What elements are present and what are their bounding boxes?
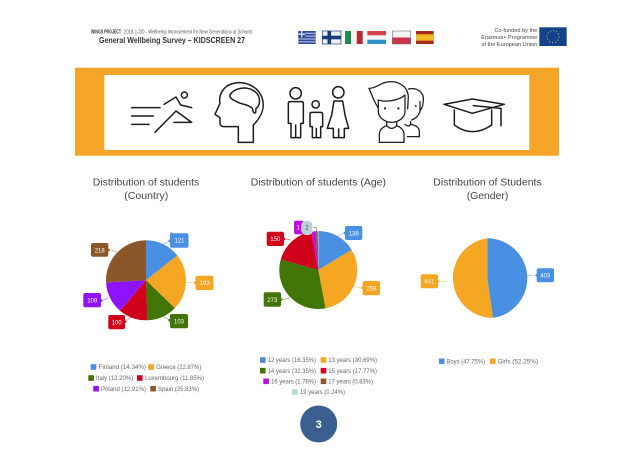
icon: students [369, 82, 423, 142]
value tag: 403: 403 [540, 274, 551, 280]
chart title: gender [433, 176, 542, 202]
icon: graduation cap [444, 99, 504, 132]
value tag: 121: 121 [174, 239, 185, 245]
chart title: gender: Distribution of Students [433, 176, 542, 188]
value tag: 273: 273 [267, 298, 278, 304]
legend: age: 14 years (32.35%) [268, 369, 316, 375]
icon: head with brain [215, 83, 263, 142]
flag: Greece [298, 31, 316, 44]
value tag: 138: 138 [349, 232, 359, 238]
legend: country: Luxembourg (11.85%) [145, 376, 204, 382]
legend: country: Poland (12.91%) [101, 387, 146, 393]
legend: country: Greece (22.87%) [156, 365, 201, 371]
pie chart: age [264, 221, 380, 309]
value tag: 109: 109 [87, 299, 98, 305]
legend: age [260, 357, 377, 396]
legend: gender: Girls (52.25%) [498, 360, 538, 366]
banner: orange frame [75, 68, 559, 156]
legend: gender: Boys (47.75%) [446, 360, 485, 366]
chart title: country: Distribution of students [93, 176, 199, 188]
legend: gender [439, 358, 538, 366]
legend: age: 15 years (17.77%) [328, 369, 377, 375]
icon: family [288, 87, 349, 138]
value tag: 441: 441 [424, 280, 435, 286]
flag: Spain [416, 31, 434, 44]
brown leader tick [309, 228, 316, 231]
icon: runner [132, 92, 192, 132]
EU co-funded logo: of the European Union [481, 42, 537, 48]
value tag: 1: 1 [297, 226, 301, 232]
legend: country: Italy (12.20%) [96, 376, 133, 382]
value tag: 103: 103 [174, 320, 185, 326]
chart title: age: Distribution of students (Age) [251, 176, 386, 188]
pie chart: country [83, 232, 214, 329]
header: project title: General Wellbeing Survey – KIDSCREEN 27 [99, 35, 245, 45]
value tag: 193: 193 [199, 281, 210, 287]
value tag: 259: 259 [366, 286, 377, 292]
legend: age: 16 years (1.78%) [271, 380, 316, 386]
value tag: 218: 218 [95, 249, 105, 255]
flags row [298, 31, 434, 44]
chart title: country [93, 176, 199, 202]
legend: age: 19 years (0.24%) [300, 390, 345, 396]
banner icons [132, 82, 504, 142]
EU co-funded logo: Erasmus+ Programme [481, 35, 537, 41]
value tag: 100: 100 [112, 321, 122, 327]
EU co-funded logo [481, 27, 567, 48]
header: project title [91, 30, 253, 45]
value tag: 150: 150 [270, 237, 281, 243]
flag: Poland [392, 31, 411, 44]
EU co-funded logo: Co-funded by the [494, 28, 537, 34]
chart title: country: (Country) [124, 190, 168, 202]
header: project title: 2018-1-DD - Wellbeing Improvement for New Generations at Schools [124, 30, 253, 36]
pie chart: gender [421, 238, 554, 318]
value tag: 2: 2 [305, 226, 309, 232]
legend: age: 12 years (16.35%) [268, 358, 316, 364]
flag: Finland [322, 31, 341, 44]
legend: age: 17 years (0.83%) [328, 380, 373, 386]
legend: age: 13 years (30.69%) [328, 358, 377, 364]
flag: Italy [345, 31, 363, 44]
flag: Luxembourg [367, 31, 386, 44]
page number badge [300, 406, 337, 442]
header: project title: WINGS PROJECT [91, 30, 121, 36]
legend: country: Finland (14.34%) [99, 365, 146, 371]
chart title: gender: (Gender) [467, 190, 508, 202]
legend: country [88, 364, 204, 393]
page number badge: 3 [316, 419, 322, 431]
legend: country: Spain (25.83%) [158, 387, 199, 393]
